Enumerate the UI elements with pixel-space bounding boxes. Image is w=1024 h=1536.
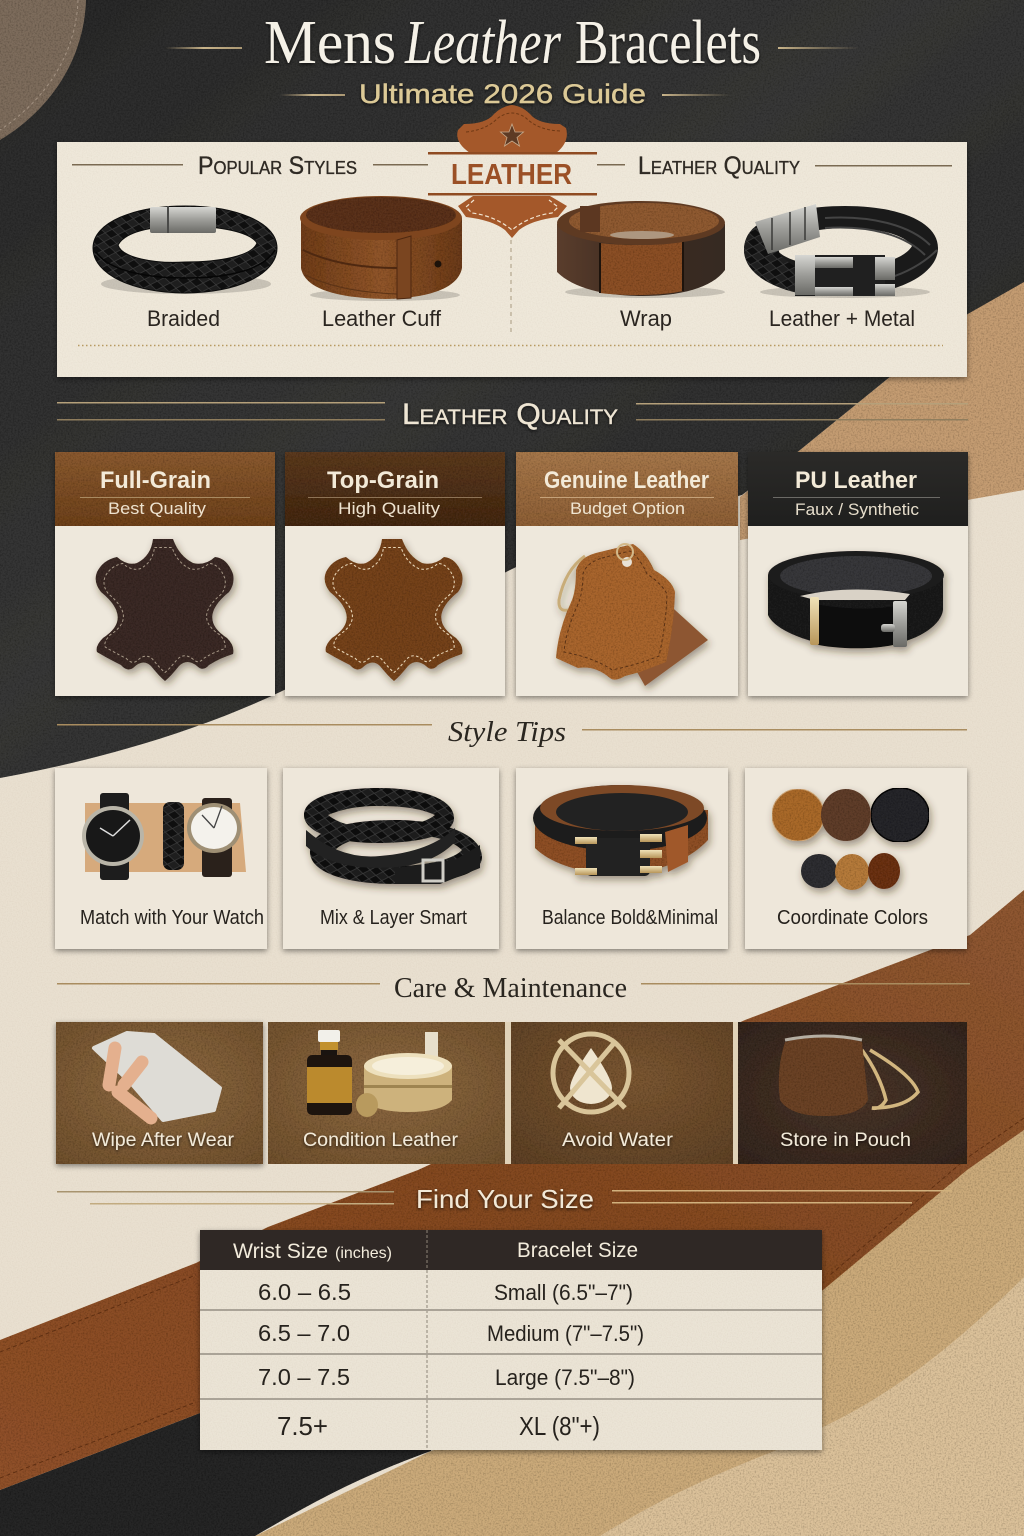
panel: full-grain card: Best Quality — [108, 499, 207, 518]
badge: leather emblem: LEATHER — [451, 159, 572, 191]
label: Coordinate Colors — [777, 907, 928, 929]
table rows — [258, 1279, 644, 1441]
label: Condition Leather — [303, 1130, 459, 1151]
icon: wide bracelet with buckle — [533, 785, 708, 876]
title: Bracelets — [575, 9, 761, 77]
table rows: Small (6.5"–7") — [494, 1280, 633, 1305]
table rows: Medium (7"–7.5") — [487, 1321, 644, 1346]
icon: dark leather hide — [96, 539, 234, 681]
panel: genuine leather card — [516, 452, 738, 696]
icon: braided bracelet — [93, 206, 277, 294]
icon: leather cuff — [300, 196, 462, 301]
icon: black faux leather bracelet — [768, 551, 944, 648]
icon: bottle and conditioner jar — [307, 1030, 452, 1117]
label: Store in Pouch — [780, 1130, 911, 1151]
icon: two watches on wrist — [82, 793, 246, 880]
table rows: 7.5+ — [277, 1411, 328, 1441]
panel: mix and layer smart — [283, 768, 499, 949]
care row gaps — [508, 1022, 736, 1164]
panel: pu leather card: PU Leather — [795, 467, 917, 494]
panel: match with your watch — [55, 768, 267, 949]
label: Avoid Water — [562, 1130, 674, 1151]
icon: leather pouch — [779, 1036, 918, 1116]
panel: popular styles — [57, 105, 967, 377]
panel: balance bold and minimal — [516, 768, 728, 949]
icon: wrap bracelet — [557, 201, 725, 298]
table rows: Large (7.5"–8") — [495, 1365, 635, 1390]
icon: crossed out water drop — [553, 1034, 629, 1112]
icon: leather and metal bracelet — [744, 204, 938, 298]
icon: leather tag — [556, 544, 708, 686]
panel: coordinate colors — [745, 768, 967, 949]
panel: genuine leather card: Genuine Leather — [544, 467, 709, 494]
panel: store in pouch — [738, 1022, 967, 1164]
panel: avoid water — [511, 1022, 733, 1164]
panel: pu leather card — [748, 452, 968, 696]
panel: genuine leather card: Budget Option — [570, 499, 685, 518]
label: braided: Braided — [147, 306, 220, 331]
label: Mix & Layer Smart — [320, 907, 467, 929]
table header: (inches) — [335, 1245, 392, 1262]
table header: Wrist Size — [233, 1240, 328, 1263]
label: wrap: Wrap — [620, 306, 672, 331]
label: Match with Your Watch — [80, 907, 264, 929]
icon: leather swatches — [772, 788, 929, 890]
table rows: 7.0 – 7.5 — [258, 1364, 350, 1390]
heading: style tips: Style Tips — [448, 716, 566, 748]
table rows: XL (8"+) — [519, 1411, 600, 1441]
label: Balance Bold&Minimal — [542, 907, 718, 929]
label: leather cuff: Leather Cuff — [322, 306, 442, 331]
label: Wipe After Wear — [92, 1130, 235, 1151]
label: leather plus metal: Leather + Metal — [769, 306, 915, 331]
panel: top-grain card — [285, 452, 505, 696]
panel: full-grain card — [55, 452, 275, 696]
heading: care and maintenance: Care & Maintenance — [394, 972, 627, 1004]
subtitle: Ultimate 2026 Guide — [359, 79, 646, 109]
icon: brown leather hide — [325, 539, 463, 681]
panel: pu leather card: Faux / Synthetic — [795, 500, 920, 519]
heading: leather quality: Leather Quality — [638, 152, 800, 180]
panel: top-grain card: Top-Grain — [327, 467, 439, 494]
heading: find your size: Find Your Size — [416, 1184, 594, 1214]
table rows: 6.0 – 6.5 — [258, 1279, 351, 1305]
panel: top-grain card: High Quality — [338, 499, 441, 518]
heading: popular styles: Popular Styles — [198, 152, 357, 180]
title: Mens — [264, 9, 396, 77]
icon: cloth and hand — [94, 1033, 220, 1120]
table header: Bracelet Size — [517, 1239, 638, 1262]
panel: condition leather — [268, 1022, 505, 1164]
table: wrist size to bracelet size — [200, 1230, 822, 1450]
table rows: 6.5 – 7.0 — [258, 1320, 350, 1346]
panel: wipe after wear — [56, 1022, 263, 1164]
icon: layered bracelets — [304, 788, 482, 884]
title — [165, 9, 860, 77]
badge: leather emblem — [428, 105, 597, 238]
panel: full-grain card: Full-Grain — [100, 467, 211, 494]
heading: leather quality: Leather Quality — [402, 398, 618, 431]
title: Leather — [404, 9, 562, 77]
table header — [200, 1230, 822, 1270]
